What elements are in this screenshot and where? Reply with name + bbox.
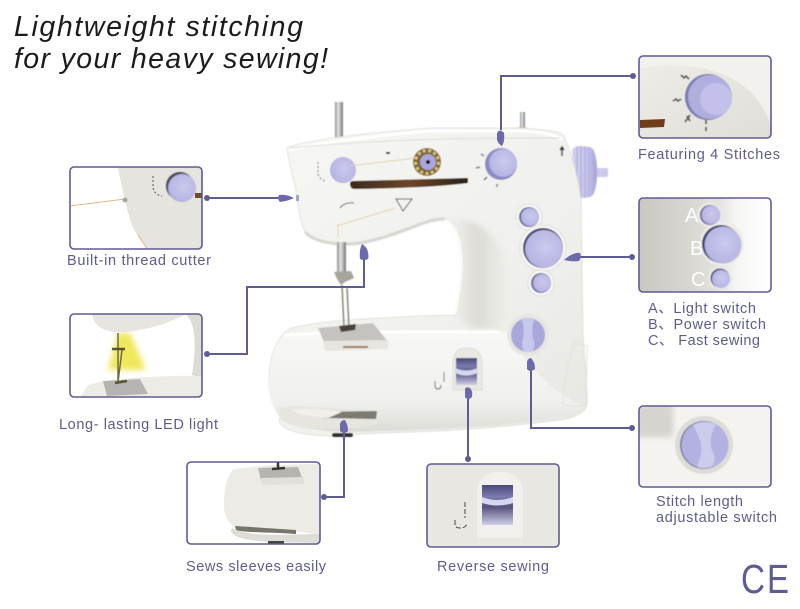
panel: stitch length xyxy=(636,404,771,487)
label: sleeves: Sews sleeves easily xyxy=(186,559,327,575)
needle plate xyxy=(318,323,388,351)
label: button list: C、 Fast sewing xyxy=(648,333,760,349)
label: stitch length xyxy=(656,494,777,526)
hand wheel xyxy=(572,146,608,198)
title: Lightweight stitching xyxy=(14,11,303,43)
needle bar xyxy=(334,242,354,328)
label: button list: B、Power switch xyxy=(648,317,766,333)
connector: stitch dial xyxy=(497,73,636,146)
label: LED light: Long- lasting LED light xyxy=(59,417,218,433)
label: thread cutter: Built-in thread cutter xyxy=(67,253,211,269)
connector: sleeves xyxy=(321,420,348,500)
button B xyxy=(520,225,566,271)
sewing machine xyxy=(269,102,608,437)
panel: thread cutter xyxy=(70,165,204,252)
label: stitch length: Stitch length xyxy=(656,494,743,510)
left thread knob xyxy=(318,157,356,183)
lower arm xyxy=(279,407,377,429)
tension dial xyxy=(413,148,441,176)
CE mark: C xyxy=(741,556,765,602)
label: 4 stitches: Featuring 4 Stitches xyxy=(638,147,780,163)
panel: sleeves xyxy=(187,462,322,544)
connector: stitch length xyxy=(527,358,635,431)
panel: buttons A B C: C xyxy=(691,269,705,291)
connector: reverse sewing xyxy=(465,387,472,462)
buttons xyxy=(516,204,566,296)
button A xyxy=(516,204,542,230)
panel: buttons A B C xyxy=(639,198,771,292)
title xyxy=(14,11,328,75)
thread and markings xyxy=(337,158,416,238)
connector: LED light xyxy=(204,244,368,357)
stitch length knob xyxy=(507,314,549,356)
panel: buttons A B C: A xyxy=(685,205,699,227)
base front xyxy=(269,331,585,432)
panel: 4 stitches xyxy=(639,56,771,138)
connector: thread cutter xyxy=(204,195,299,202)
label: reverse sewing: Reverse sewing xyxy=(437,559,549,575)
side panel outline xyxy=(563,343,587,406)
machine body xyxy=(269,128,587,436)
presser foot xyxy=(339,324,356,332)
reverse lever xyxy=(435,348,482,390)
stitch dial xyxy=(476,148,517,187)
thread slot xyxy=(350,178,468,189)
label: button list xyxy=(648,301,766,349)
label: stitch length: adjustable switch xyxy=(656,510,777,526)
panel: LED light xyxy=(70,314,204,397)
title: for your heavy sewing! xyxy=(14,43,328,75)
connector: buttons xyxy=(564,253,635,261)
CE mark: E xyxy=(767,556,789,602)
head underside shading xyxy=(305,219,445,244)
spool pins xyxy=(335,102,526,138)
panel: buttons A B C: B xyxy=(690,238,703,260)
head top highlight xyxy=(289,131,562,150)
label: button list: A、Light switch xyxy=(648,301,756,317)
panel: reverse sewing xyxy=(427,464,559,547)
CE mark xyxy=(741,556,789,602)
column shading xyxy=(445,218,510,330)
button C xyxy=(528,270,554,296)
